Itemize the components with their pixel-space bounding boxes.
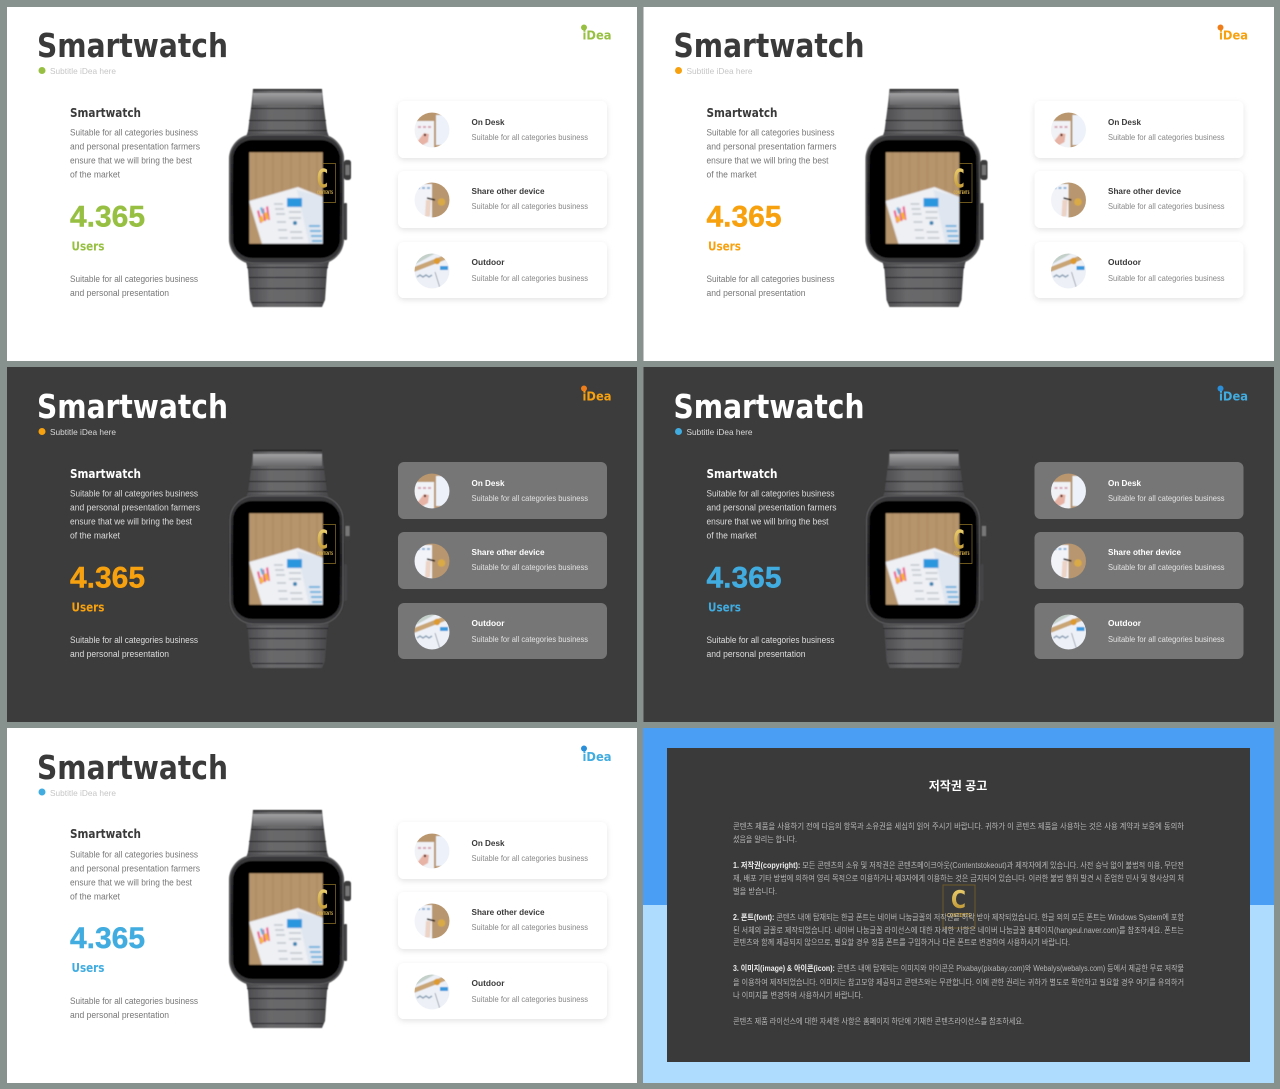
notice intro [733,821,1185,844]
watch: C [317,886,328,916]
notice intro: 콘텐츠 제품을 사용하기 전에 다음의 항목과 소유권을 세심히 읽어 주시기 바랍니다. 귀하가 이 콘텐츠 제품을 사용하는 것은 사용 계약과 보증에 동의하 [733,821,1185,831]
watch [866,450,988,668]
text block: note [706,635,835,659]
text block: description [70,106,200,180]
notice clause 2: 2. 폰트(font): 콘텐츠 내에 탑재되는 한글 폰트는 네이버 나눔글꼴의 저작권을 허락 받아 제작되었습니다. 한글 외의 모든 폰트는 Windows System에 포함 [733,912,1185,922]
watch [229,89,351,307]
card: share other device [398,892,607,949]
text block: description [70,827,200,902]
card: on desk: On Desk [1108,478,1141,488]
text block: note: and personal presentation [70,288,169,298]
text block: description: ensure that we will bring the best [70,878,192,888]
stat number: 4.365 [706,200,782,234]
notice clause 2 [733,912,1185,947]
watch [229,810,351,1028]
stat number: 4.365 [70,200,145,234]
slide 3 background [7,367,637,722]
watch: CONTENTS [954,190,970,196]
card: outdoor: Outdoor [472,257,505,267]
card: share other device [398,171,607,228]
notice clause 3 [733,963,1184,1000]
card: on desk [1034,101,1244,158]
subtitle: Subtitle iDea here [50,427,116,437]
card: on desk [398,462,607,519]
card: outdoor [1034,242,1244,298]
notice clause 3: 을 이용하여 제작되었습니다. 이미지는 참고모양 제공되고 콘텐츠와는 무관합니다. 이에 관한 권리는 귀하가 별도로 확인하고 필요할 경우 여기를 유의하거 [733,977,1184,987]
text block: note: Suitable for all categories business [706,635,835,645]
notice clause 3: 나 이미지를 변경하여 사용하시기 바랍니다. [733,990,863,1000]
card: outdoor: Outdoor [472,618,505,628]
card: outdoor [398,603,607,659]
card: share other device: Share other device [472,907,545,917]
title: Smartwatch [37,387,228,426]
stat number: 4.365 [706,562,782,594]
notice clause 2: 콘텐츠와 함께 제공되지 않으므로, 필요할 경우 정품 폰트를 구입하거나 다른 폰트로 변경하여 사용하시기 바랍니다. [733,937,1070,947]
text block: description: of the market [706,170,757,180]
watch: C [954,164,964,194]
watch: CONTENTS [317,551,333,557]
panel: slide 5 light blue [7,728,637,1083]
text block: note: Suitable for all categories business [70,635,198,645]
text block: description: Suitable for all categories business [706,128,835,138]
text block: description: Smartwatch [70,467,141,481]
text block: description: and personal presentation farmers [706,502,837,512]
card: on desk: Suitable for all categories business [472,493,588,503]
stat label: Users [72,961,104,975]
text block: description: Suitable for all categories business [70,128,198,138]
title: Smartwatch [37,748,228,787]
card: on desk: Suitable for all categories business [1108,493,1224,503]
card: on desk [1034,462,1244,519]
text block: note [706,274,835,298]
watch: C [317,526,328,556]
text block: note: and personal presentation [70,649,169,659]
watch: CONTENTS [954,551,970,557]
logo: iDea [1219,28,1248,42]
text block: description: Smartwatch [70,106,141,120]
slide 5 background [7,728,637,1083]
card: outdoor: Suitable for all categories business [472,634,588,644]
panel: slide 1 light green [7,7,637,361]
text block: description: Suitable for all categories business [70,850,198,860]
text block: note: Suitable for all categories business [70,996,198,1006]
panel: copyright notice [643,728,1274,1083]
notice heading: 저작권 공고 [929,778,987,793]
notice clause 3: 3. 이미지(image) & 아이콘(icon): 콘텐츠 내에 탑재되는 이미지와 아이콘은 Pixabay(pixabay.com)와 Webalys(webalys.com) 등에서 제공한 무료 저작물 [733,963,1184,973]
text block: description: ensure that we will bring the best [706,516,829,526]
logo: iDea [582,388,612,404]
card: on desk: On Desk [472,117,505,127]
notice dark box [667,748,1250,1062]
slide 1 background [7,7,637,361]
card: outdoor: Outdoor [1108,257,1142,267]
notice intro: 셨음을 알리는 합니다. [733,834,797,844]
notice clause 1: 1. 저작권(copyright): 모든 콘텐츠의 소유 및 저작권은 콘텐츠메이크아웃(Contentstokeout)과 제작자에게 있습니다. 사전 승낙 없이 불법적 이용, 무단전 [733,860,1184,870]
text block: description: of the market [706,530,757,540]
text block: description: Suitable for all categories business [706,488,835,498]
panel: slide 2 light orange [644,7,1274,361]
watermark logo: CONTENTS [947,913,971,919]
text block: description: ensure that we will bring the best [70,156,192,166]
card: on desk: Suitable for all categories business [472,132,588,142]
text block: note: and personal presentation [706,649,806,659]
card: outdoor [1034,603,1244,659]
text block: note [70,635,198,659]
watch: CONTENTS [317,190,333,196]
card: on desk [398,822,607,879]
text block: note: Suitable for all categories business [706,274,835,284]
text block: note: and personal presentation [70,1010,169,1020]
card: share other device [1034,532,1244,589]
card: on desk: On Desk [1108,117,1141,127]
notice background bottom [643,905,1274,1083]
slide 4 background [644,367,1274,722]
stat number: 4.365 [70,562,145,594]
text block: description: and personal presentation farmers [70,864,200,874]
text block: description: Suitable for all categories business [70,488,198,498]
text block: note: Suitable for all categories business [70,274,198,284]
text block: description: and personal presentation farmers [706,142,837,152]
card: on desk: On Desk [472,478,505,488]
text block: description: Smartwatch [706,467,778,481]
subtitle: Subtitle iDea here [686,66,753,76]
watch: C [954,526,964,556]
card: outdoor: Suitable for all categories business [472,273,588,283]
notice background top [643,728,1274,905]
slide 2 background [644,7,1274,361]
card: on desk: Suitable for all categories business [1108,132,1224,142]
notice clause 1: 재, 배포 기타 방법에 의하여 영리 목적으로 이용하거나 제3자에게 이용하는 것은 금지되어 있습니다. 이러한 불법 행위 발견 시 준엄한 민사 및 형사상의 처 [733,873,1184,883]
text block: description: ensure that we will bring the best [706,156,829,166]
watermark logo [943,885,975,928]
card: share other device [1034,171,1244,228]
stat label: Users [708,600,741,614]
card: share other device: Share other device [472,186,545,196]
logo: iDea [582,749,612,764]
card: outdoor [398,963,607,1019]
card: share other device: Suitable for all categories business [1108,562,1224,572]
text block: description: and personal presentation farmers [70,142,200,152]
stat label: Users [72,600,104,614]
card: outdoor: Outdoor [472,978,505,988]
text block: description [706,467,837,540]
logo: iDea [582,28,612,42]
title: Smartwatch [37,26,228,65]
stat number: 4.365 [70,922,145,955]
text block: note [70,996,198,1020]
card: share other device: Suitable for all categories business [1108,201,1224,211]
card: share other device [398,532,607,589]
stat label: Users [72,240,104,254]
card: share other device: Suitable for all categories business [472,562,588,572]
text block: description: Smartwatch [706,106,778,120]
text block: note [70,274,198,298]
card: on desk [398,101,607,158]
card: on desk: Suitable for all categories business [472,853,588,863]
watermark logo: C [951,885,966,914]
card: outdoor: Suitable for all categories business [1108,273,1224,283]
subtitle: Subtitle iDea here [50,66,116,76]
notice clause 2: 된 서체의 글꼴로 제작되었습니다. 네이버 나눔글꼴 라이선스에 대한 자세한 사항은 네이버 나눔글꼴 홈페이지(hangeul.naver.com)를 참조하세요. 폰트는 [733,925,1184,935]
stat label: Users [708,240,741,254]
card: share other device: Share other device [1108,186,1181,196]
panel: slide 3 dark orange [7,367,637,722]
subtitle: Subtitle iDea here [50,788,116,798]
card: outdoor: Suitable for all categories business [1108,634,1224,644]
text block: note: and personal presentation [706,288,806,298]
notice clause 1: 벌을 받습니다. [733,886,777,896]
card: share other device: Share other device [1108,547,1181,557]
subtitle: Subtitle iDea here [686,427,753,437]
card: on desk: On Desk [472,838,505,848]
text block: description: of the market [70,530,120,540]
card: outdoor: Suitable for all categories business [472,994,588,1004]
text block: description: ensure that we will bring the best [70,516,192,526]
panel: slide 4 dark blue [644,367,1274,722]
title: Smartwatch [674,387,864,426]
text block: description: Smartwatch [70,827,141,841]
watch: C [317,164,328,194]
watch: CONTENTS [317,911,333,917]
text block: description [706,106,837,180]
logo: iDea [1219,388,1248,404]
title: Smartwatch [674,26,864,65]
text block: description [70,467,200,540]
card: share other device: Suitable for all categories business [472,922,588,932]
card: outdoor [398,242,607,298]
text block: description: and personal presentation farmers [70,502,200,512]
text block: description: of the market [70,170,120,180]
text block: description: of the market [70,892,120,902]
notice footer: 콘텐츠 제품 라이선스에 대한 자세한 사항은 홈페이지 하단에 기재한 콘텐츠라이선스를 참조하세요. [733,1016,1024,1026]
card: share other device: Suitable for all categories business [472,201,588,211]
notice clause 1 [733,860,1184,896]
watch [229,450,351,668]
watch [866,89,988,307]
card: share other device: Share other device [472,547,545,557]
card: outdoor: Outdoor [1108,618,1142,628]
